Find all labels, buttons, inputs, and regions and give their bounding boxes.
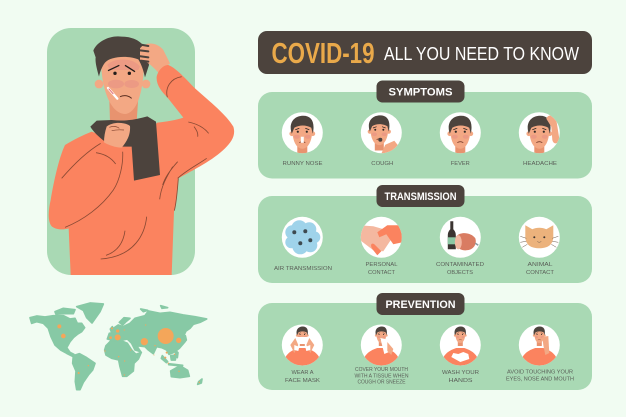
label: air transmission: AIR TRANSMISSION <box>274 266 332 272</box>
label: wear a face mask: FACE MASK <box>285 378 320 384</box>
icon: wear a face mask <box>282 324 323 366</box>
label: fever: FEVER <box>451 161 470 167</box>
title banner <box>258 31 592 74</box>
panel: person backdrop <box>47 28 195 275</box>
label: cough: COUGH <box>371 161 393 167</box>
sweater <box>49 65 234 275</box>
icon: avoid touching face <box>519 324 560 366</box>
panel: prevention <box>258 293 592 390</box>
heading: all you need to know: ALL YOU NEED TO KNOW <box>384 43 579 64</box>
label: contaminated objects: OBJECTS <box>447 270 473 276</box>
tab: prevention <box>376 293 464 315</box>
icon: fever <box>440 112 481 155</box>
icon: cover your mouth <box>361 324 402 366</box>
label: avoid touching face: EYES, NOSE AND MOUTH <box>506 376 574 382</box>
icon: runny nose <box>282 112 323 155</box>
label: personal contact: CONTACT <box>368 270 395 276</box>
label: cover your mouth: COVER YOUR MOUTH <box>355 367 408 373</box>
label: personal contact <box>366 262 398 276</box>
label: cover your mouth <box>354 367 409 386</box>
label: cover your mouth: COUGH OR SNEEZE <box>358 380 406 386</box>
label: wash your hands: WASH YOUR <box>442 370 479 376</box>
icon: contaminated objects <box>440 217 481 258</box>
label: wear a face mask <box>285 370 320 384</box>
label: personal contact: PERSONAL <box>366 262 398 268</box>
tab: transmission <box>376 185 464 207</box>
towel <box>90 116 160 181</box>
icon: wash your hands <box>440 324 481 366</box>
world map <box>30 303 207 390</box>
tab: transmission: TRANSMISSION <box>384 191 457 203</box>
tab: symptoms <box>376 80 464 102</box>
label: cover your mouth: WITH A TISSUE WHEN <box>354 373 409 379</box>
label: contaminated objects <box>436 262 484 276</box>
icon: headache <box>519 112 560 155</box>
panel: transmission <box>258 185 592 283</box>
label: wash your hands <box>442 370 479 384</box>
icon: animal contact <box>519 217 560 258</box>
label: runny nose: RUNNY NOSE <box>282 161 323 167</box>
panel: symptoms <box>258 80 592 178</box>
icon: personal contact <box>360 217 402 258</box>
heading: COVID-19: COVID-19 <box>272 38 374 70</box>
thermometer <box>108 88 117 99</box>
icon: cough <box>361 112 402 154</box>
label: avoid touching face: AVOID TOUCHING YOUR <box>507 370 573 376</box>
label: avoid touching face <box>506 370 574 382</box>
label: wear a face mask: WEAR A <box>292 370 314 376</box>
label: headache: HEADACHE <box>523 161 557 167</box>
label: animal contact: CONTACT <box>526 270 554 276</box>
tab: symptoms: SYMPTOMS <box>388 86 452 98</box>
tab: prevention: PREVENTION <box>386 299 456 311</box>
label: animal contact <box>526 262 554 276</box>
illustration: sick man <box>49 36 234 275</box>
hand at throat <box>104 123 130 148</box>
label: animal contact: ANIMAL <box>528 262 553 268</box>
icon: air transmission <box>282 217 323 258</box>
label: wash your hands: HANDS <box>448 378 473 384</box>
raised hand <box>137 44 170 73</box>
label: contaminated objects: CONTAMINATED <box>436 262 484 268</box>
